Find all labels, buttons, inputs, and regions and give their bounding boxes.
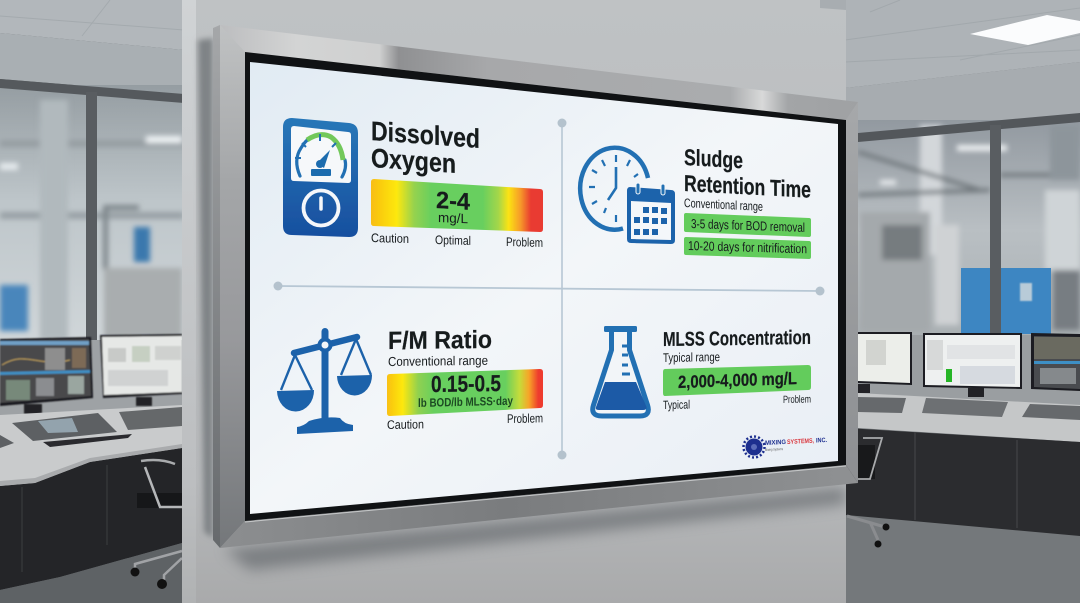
heading (371, 116, 480, 179)
quadrant dividers (274, 118, 824, 460)
range pill: nitrification: 10-20 days for nitrification (688, 238, 807, 256)
panel: F/M ratio (277, 326, 543, 434)
scale labels (387, 411, 543, 432)
logo: Mixing Systems, Inc.: MIXING (765, 439, 786, 447)
background: control room left (0, 0, 184, 603)
subheading: Typical range (663, 350, 720, 365)
scale labels: Caution (371, 231, 409, 246)
range bar: mg/L (438, 210, 468, 226)
icon: clock and calendar (580, 148, 675, 244)
ceiling light (970, 15, 1080, 45)
scale labels: Problem (507, 411, 543, 426)
subheading: Conventional range (684, 196, 763, 214)
range bar: 0.15-0.5 (431, 370, 501, 397)
icon: flask (593, 326, 648, 416)
range pill: BOD removal (684, 213, 811, 237)
heading: Oxygen (371, 143, 456, 179)
range bar: 2,000-4,000 mg/L (678, 368, 797, 392)
range bar: lb BOD/lb MLSS·day (418, 394, 513, 410)
wall column (182, 0, 846, 603)
monitors left (0, 334, 182, 414)
range bar: 2-4 (436, 187, 471, 216)
range bar (663, 365, 811, 396)
logo: Mixing Systems, Inc.: Mixing Systems (765, 447, 783, 452)
green status bar (946, 369, 952, 382)
screen (250, 62, 838, 514)
scale labels: Caution (387, 417, 424, 432)
monitors right (858, 332, 1080, 397)
background: control room right (845, 0, 1080, 603)
range pill: BOD removal: 3-5 days for BOD removal (691, 216, 805, 235)
range bar (387, 369, 543, 416)
heading: Sludge (684, 144, 743, 173)
panel: sludge retention time (580, 144, 811, 259)
heading: Dissolved (371, 116, 480, 154)
range bar (371, 179, 543, 232)
panel: dissolved oxygen (283, 116, 543, 250)
heading (684, 144, 811, 203)
heading: F/M Ratio (388, 326, 492, 355)
icon: balance scale (277, 328, 372, 434)
heading: Retention Time (684, 170, 811, 203)
logo: Mixing Systems, Inc.: SYSTEMS, (787, 438, 814, 446)
display frame (213, 25, 858, 548)
panel: MLSS concentration (593, 326, 811, 416)
control desk left (0, 405, 182, 603)
scale labels: Optimal (435, 233, 471, 248)
scale labels (371, 231, 543, 250)
scale labels (663, 394, 811, 412)
heading: MLSS Concentration (663, 327, 811, 351)
logo: Mixing Systems, Inc. (744, 436, 827, 458)
subheading: Conventional range (388, 353, 488, 369)
scale labels: Typical (663, 398, 690, 412)
logo: Mixing Systems, Inc.: INC. (816, 437, 827, 444)
icon: gauge meter (283, 118, 358, 237)
control desk right (846, 393, 1080, 548)
scale labels: Problem (783, 394, 811, 406)
scale labels: Problem (506, 235, 543, 250)
